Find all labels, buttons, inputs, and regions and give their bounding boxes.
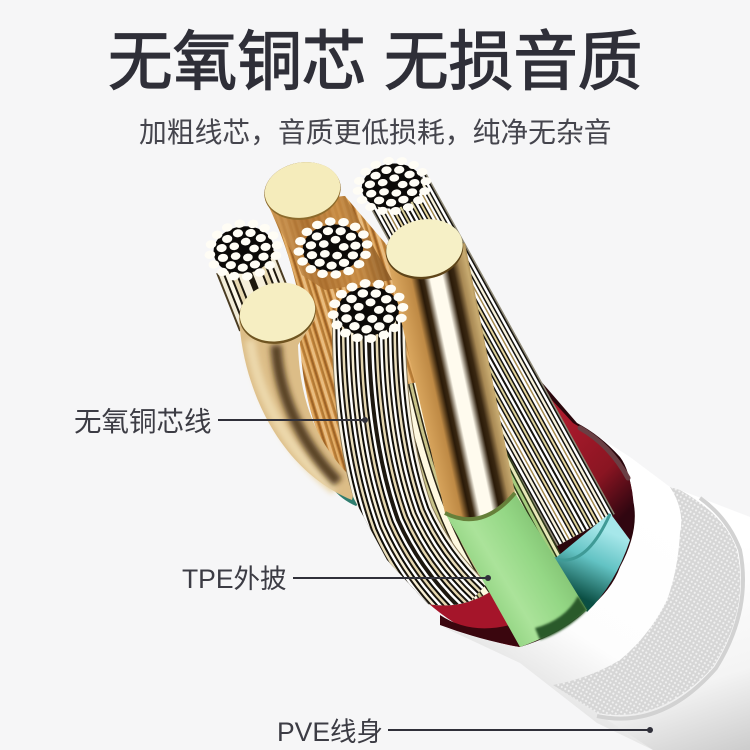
solid gold end: front (381, 213, 468, 285)
teal sleeve (553, 513, 630, 612)
left gold solid wire (239, 318, 366, 506)
title: 无损音质 (384, 26, 642, 98)
cable illustration (200, 152, 750, 750)
title (108, 26, 642, 98)
wire end caps (200, 152, 468, 351)
strand end: top (349, 152, 435, 220)
strand end: middle (290, 213, 376, 283)
green sleeve (445, 493, 587, 647)
solid gold end: left (234, 276, 321, 351)
cavity and red sleeves (428, 357, 635, 647)
copper strands behind wires (267, 196, 445, 520)
strand bundle running to teal sleeve (398, 190, 586, 530)
left strand bundle stub (245, 262, 268, 320)
callout: PVE body: PVE线身 (277, 717, 383, 747)
strand end: left (200, 214, 287, 286)
front gold solid wire (387, 243, 515, 519)
callout: TPE jacket: TPE外披 (182, 564, 287, 594)
callout: PVE body (277, 717, 653, 747)
green-tinted strands (470, 430, 565, 610)
subtitle: 加粗线芯，音质更低损耗，纯净无杂音 (139, 117, 612, 148)
callout: TPE jacket (182, 564, 491, 594)
callout: oxygen-free copper wire (74, 406, 368, 437)
callout: oxygen-free copper wire: 无氧铜芯线 (74, 406, 212, 437)
solid gold end: back (260, 156, 345, 226)
strand end: front (324, 275, 412, 347)
title: 无氧铜芯 (108, 26, 366, 98)
cable sheath (443, 423, 750, 750)
near strands (405, 385, 490, 600)
front strand bundle (369, 318, 462, 610)
